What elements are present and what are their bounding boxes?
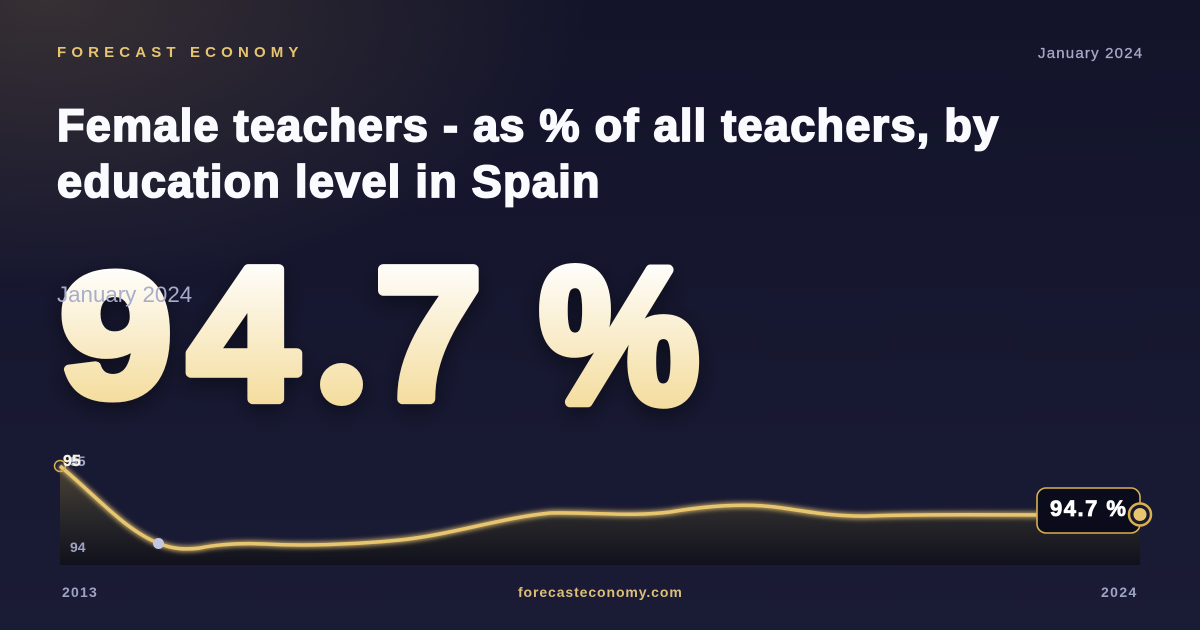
date overlay label: January 2024	[57, 282, 192, 307]
title: Female teachers - as % of all teachers, by	[57, 100, 1000, 150]
start year: 2013	[62, 584, 98, 600]
sparkline chart	[54, 453, 1152, 565]
hero value: %	[540, 230, 699, 440]
hero value	[60, 230, 702, 440]
end year: 2024	[1101, 584, 1138, 600]
hero value: .	[318, 233, 369, 438]
title: education level in Spain	[57, 156, 601, 207]
title	[57, 100, 1000, 208]
axis label 94: 94	[70, 539, 86, 555]
website: forecasteconomy.com	[518, 584, 683, 600]
hero value: 4	[188, 230, 298, 439]
line	[60, 466, 1140, 549]
hero value: 7	[375, 230, 482, 440]
value callout: 94.7 %	[1050, 496, 1128, 521]
line glow	[60, 466, 1140, 549]
value callout	[1037, 488, 1140, 533]
start marker	[54, 460, 66, 472]
area fill	[60, 466, 1140, 565]
hero value: 9	[60, 238, 172, 434]
date top right: January 2024	[1038, 45, 1143, 62]
low point marker	[153, 538, 164, 549]
end marker	[1129, 504, 1151, 526]
brand label: FORECAST ECONOMY	[57, 44, 304, 61]
start value: 95	[63, 453, 81, 470]
axis label 95 faint: 95	[70, 453, 86, 469]
